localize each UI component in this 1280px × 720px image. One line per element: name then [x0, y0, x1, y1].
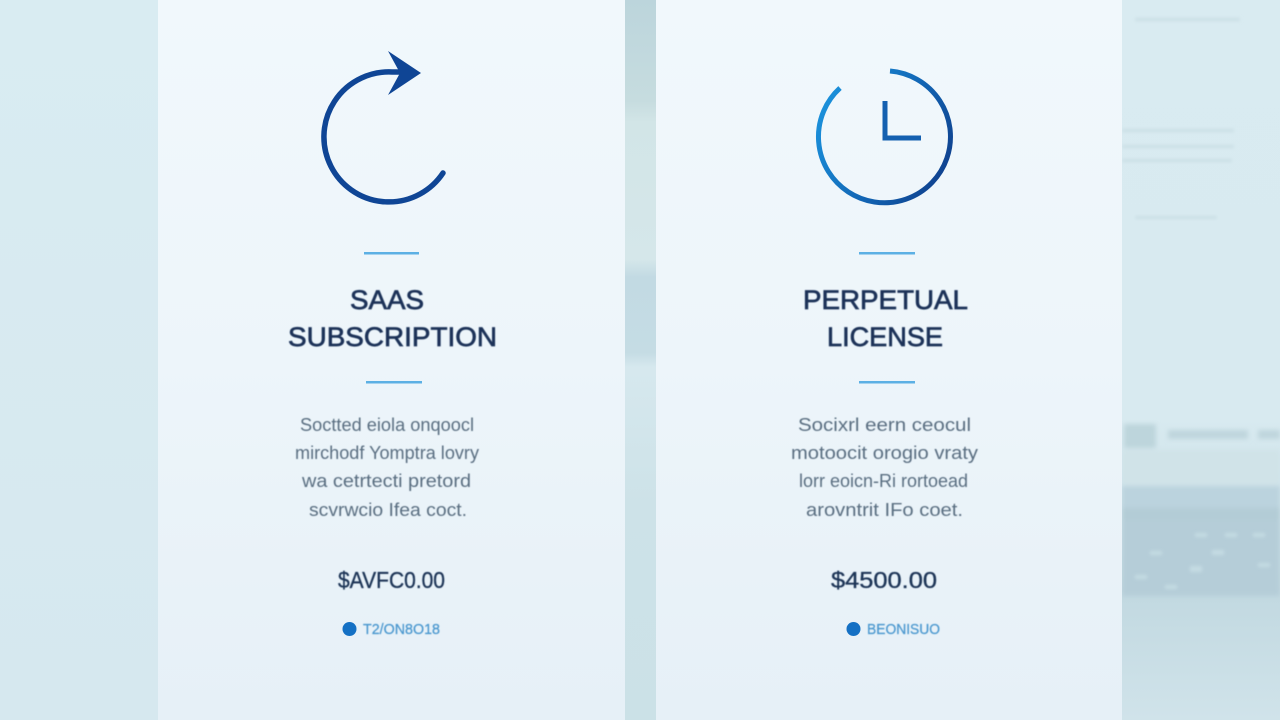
background: left strip — [0, 0, 158, 720]
text block: description: Socixrl eern ceocul — [798, 415, 971, 435]
text block: description — [295, 415, 479, 520]
text block: description: lorr eoicn-Ri rortoead — [799, 471, 968, 491]
price: $4500.00 — [831, 567, 937, 593]
divider: upper — [859, 252, 915, 254]
text block: description: arovntrit IFo coet. — [806, 500, 963, 520]
tag: status: BEONISUO — [867, 621, 940, 638]
text block: description: wa cetrtecti pretord — [301, 471, 471, 491]
divider: lower — [366, 381, 422, 384]
heading: SaaS subscription — [288, 285, 497, 352]
icon: renewal arrow — [324, 51, 443, 202]
text block: description: motoocit orogio vraty — [791, 443, 978, 463]
text block: description: Soctted eiola onqoocl — [300, 415, 474, 435]
heading: SaaS subscription: SAAS — [350, 285, 424, 315]
panel: perpetual license — [656, 0, 1122, 720]
panel: SaaS subscription — [158, 0, 625, 720]
divider: upper — [364, 252, 419, 254]
text block: description — [791, 415, 978, 520]
tag: status: T2/ON8O18 — [363, 621, 440, 638]
divider: lower — [859, 381, 915, 384]
background: right strip with blurred laptop — [1122, 0, 1280, 720]
heading: perpetual license — [803, 285, 968, 352]
heading: SaaS subscription: SUBSCRIPTION — [288, 322, 497, 352]
price: $AVFC0.00 — [338, 567, 445, 593]
text block: description: scvrwcio Ifea coct. — [309, 500, 467, 520]
heading: perpetual license: PERPETUAL — [803, 285, 968, 315]
text block: description: mirchodf Yomptra lovry — [295, 443, 479, 463]
background: centre gap — [624, 0, 657, 720]
icon: clock — [818, 71, 950, 203]
heading: perpetual license: LICENSE — [827, 322, 943, 352]
